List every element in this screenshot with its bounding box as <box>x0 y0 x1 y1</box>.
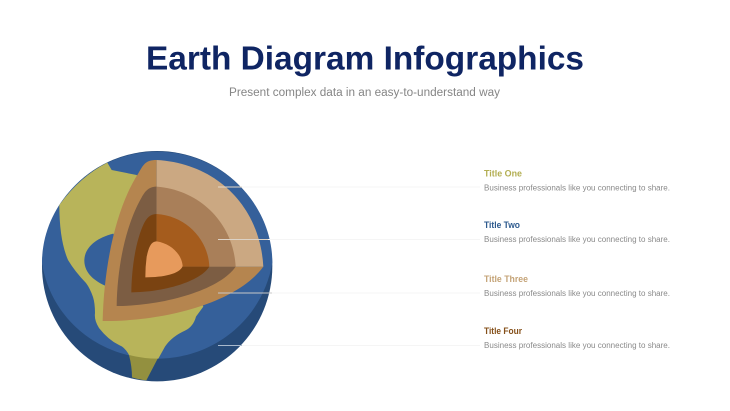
item: title four: Title Four <box>484 326 522 337</box>
item: title one: Title One <box>484 168 522 180</box>
inner sea <box>84 234 117 287</box>
globe top face <box>42 152 272 359</box>
item: title one: Business professionals like you connecting to share. <box>484 184 670 192</box>
item: title two <box>484 220 670 244</box>
item: title three: Title Three <box>484 274 528 285</box>
outer core shell <box>131 214 209 292</box>
earth diagram <box>42 151 272 381</box>
crust light quarter <box>157 160 263 267</box>
title: Earth Diagram Infographics <box>146 40 584 78</box>
item: title two: Title Two <box>484 220 520 231</box>
land mass <box>59 163 203 359</box>
item: title three <box>484 274 670 298</box>
mantle shell <box>117 187 236 306</box>
leader lines <box>218 186 480 346</box>
item: title one <box>484 168 670 192</box>
crust outer shell <box>103 160 263 321</box>
globe base shadow <box>42 151 272 381</box>
land side dark olive <box>129 355 158 380</box>
item: title four: Business professionals like you connecting to share. <box>484 341 670 350</box>
inner core <box>145 241 183 277</box>
item: title three: Business professionals like you connecting to share. <box>484 289 670 298</box>
subtitle: Present complex data in an easy-to-understand way <box>229 87 500 99</box>
item: title four <box>484 326 670 350</box>
outer core light quarter <box>157 214 209 267</box>
mantle light quarter <box>157 187 236 267</box>
item: title two: Business professionals like you connecting to share. <box>484 235 670 244</box>
